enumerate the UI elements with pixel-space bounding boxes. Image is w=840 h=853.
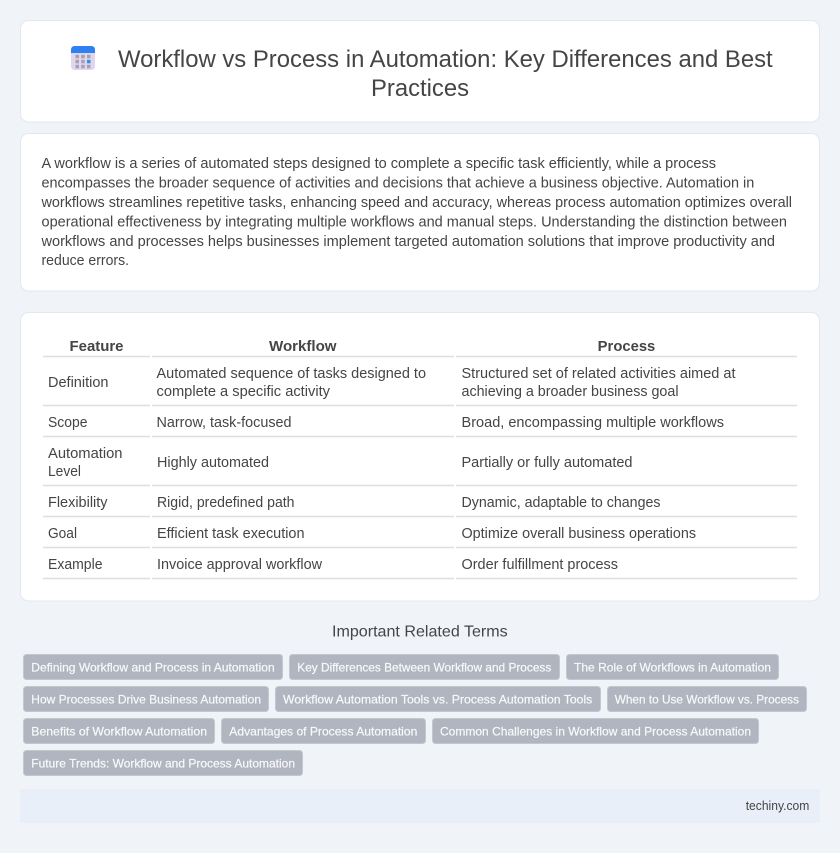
table row: definition: achieving a broader business goal: [462, 384, 678, 400]
text block: workflow and process description: [40, 156, 792, 269]
tag: [24, 686, 268, 712]
table row: definition: Automated sequence of tasks designed to: [156, 366, 426, 382]
table row: goal: Goal: [48, 526, 77, 542]
table row: definition: Definition: [48, 375, 108, 391]
title: Workflow vs Process in Automation: Key Differences and Best: [118, 46, 773, 73]
footer: [20, 789, 820, 823]
table row: automation level: [48, 446, 632, 480]
text block: workflow and process description: A workflow is a series of automated steps designed to complete a specific task efficiently, while a process: [42, 156, 716, 172]
table row: flexibility: Dynamic, adaptable to changes: [462, 495, 660, 511]
tag: [608, 686, 806, 712]
panel: introduction text: [20, 134, 820, 291]
table row: goal: Efficient task execution: [157, 526, 304, 542]
text block: workflow and process description: encompasses the broader sequence of activities and decisions that achieve a business objective. Automation in: [42, 176, 754, 192]
tag: Future Trends: Workflow and Process Automation: [31, 756, 295, 770]
tag: Advantages of Process Automation: [229, 724, 417, 738]
tag: [432, 718, 758, 744]
text block: workflow and process description: workflows and processes helps businesses implement targeted automation solutions that improve productivity and: [40, 234, 775, 250]
tag: When to Use Workflow vs. Process: [615, 692, 799, 706]
tag: Key Differences Between Workflow and Process: [297, 660, 551, 674]
footer source text: techiny.com: [746, 799, 809, 813]
table row: example: Order fulfillment process: [462, 557, 618, 573]
tag: [24, 654, 282, 680]
text block: workflow and process description: operational effectiveness by integrating multiple workflows and manual steps. Understanding the distinction between: [42, 214, 787, 230]
panel: related term tags: [24, 654, 806, 776]
table header row: [70, 339, 655, 355]
tag: Workflow Automation Tools vs. Process Automation Tools: [283, 692, 592, 706]
title: Practices: [371, 75, 469, 102]
table row: automation level: Level: [48, 464, 81, 480]
table row: automation level: Highly automated: [157, 455, 269, 471]
table row: automation level: Partially or fully automated: [462, 455, 632, 471]
table header row: Feature: [70, 339, 124, 355]
table row: scope: [48, 415, 724, 431]
tag: How Processes Drive Business Automation: [31, 692, 261, 706]
table row: example: [48, 557, 618, 573]
table header row: Workflow: [269, 339, 337, 355]
tag: [24, 718, 214, 744]
table row: goal: Optimize overall business operations: [462, 526, 696, 542]
table row: example: Example: [48, 557, 102, 573]
tag: [24, 750, 302, 776]
table row: flexibility: [48, 495, 660, 511]
tag: The Role of Workflows in Automation: [574, 660, 771, 674]
table row: flexibility: Flexibility: [48, 495, 108, 511]
text block: workflow and process description: workflows streamlines repetitive tasks, enhancing speed and accuracy, whereas process automation optimizes overall: [40, 195, 792, 211]
table row: automation level: Automation: [48, 446, 122, 462]
table row: goal: [48, 526, 696, 542]
text block: workflow and process description: reduce errors.: [42, 253, 129, 269]
table row: scope: Narrow, task-focused: [156, 415, 292, 431]
table row: scope: Scope: [48, 415, 88, 431]
table row: definition: Structured set of related activities aimed at: [462, 366, 736, 382]
heading: important related terms: Important Related Terms: [332, 624, 508, 640]
title: [118, 46, 773, 102]
tag: Benefits of Workflow Automation: [31, 724, 207, 738]
tag: Defining Workflow and Process in Automation: [31, 660, 275, 674]
table row: scope: Broad, encompassing multiple workflows: [462, 415, 724, 431]
table header row: Process: [598, 339, 655, 355]
tag: [566, 654, 778, 680]
table row: definition: complete a specific activity: [156, 384, 331, 400]
tag: [290, 654, 560, 680]
table row: example: Invoice approval workflow: [157, 557, 323, 573]
tag: [222, 718, 426, 744]
panel: comparison table: [20, 312, 820, 601]
tag: [276, 686, 600, 712]
table row: flexibility: Rigid, predefined path: [157, 495, 294, 511]
tag: Common Challenges in Workflow and Process Automation: [440, 724, 751, 738]
icon: calendar: [71, 46, 95, 70]
table row: definition: [48, 366, 736, 400]
panel: title header: [20, 20, 820, 122]
